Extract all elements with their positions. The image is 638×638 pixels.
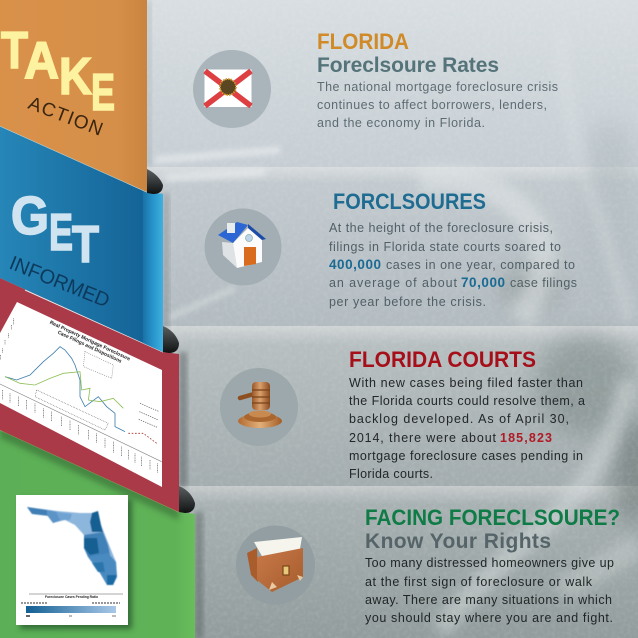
text block: know your rights: at the first sign of foreclosure or walk xyxy=(365,575,593,589)
text block: court backlog: 185,823 xyxy=(500,431,552,445)
heading: TAKE: K xyxy=(59,48,92,106)
chart: foreclosure filings xyxy=(0,302,162,487)
ribbon fold: blue xyxy=(163,326,179,353)
text block: height of the crisis: per year before the crisis. xyxy=(329,295,486,309)
text block: court backlog: mortgage foreclosure cases pending in xyxy=(349,449,583,463)
text block: height of the crisis: At the height of the foreclosure crisis, xyxy=(329,221,553,235)
text block: height of the crisis: 70,000 xyxy=(461,275,505,290)
projection line xyxy=(128,433,157,443)
text block: court backlog: Florida courts. xyxy=(349,467,433,481)
text block: height of the crisis: 400,000 xyxy=(329,257,381,272)
heading: TAKE: T xyxy=(1,22,28,80)
text block: height of the crisis: filings in Florida state courts soared to xyxy=(329,240,561,254)
heading: Florida Courts: FLORIDA COURTS xyxy=(349,347,536,372)
text block: height of the crisis: an average of about xyxy=(329,276,458,290)
heading: GET: T xyxy=(72,216,99,274)
text block: know your rights: away. There are many situations in which xyxy=(365,593,612,607)
ribbon fold: orange xyxy=(147,169,163,194)
filings line xyxy=(5,347,125,432)
ribbon: red xyxy=(0,278,179,520)
heading: TAKE xyxy=(1,22,115,122)
subheading: ACTION: ACTION xyxy=(25,93,106,141)
text block: court backlog: backlog developed. As of April 30, xyxy=(349,412,569,426)
map of Florida xyxy=(27,507,117,585)
chart axis xyxy=(0,318,162,473)
map legend: Foreclosure Cases Pending Ratio xyxy=(45,595,98,599)
heading: Florida Foreclosure Rates: Foreclsoure Rates xyxy=(317,54,499,77)
text block: national crisis: continues to affect borrowers, lenders, xyxy=(317,98,547,112)
heading: Facing Foreclosure: FACING FORECLSOURE? xyxy=(365,505,620,530)
chart title: Case Filings and Dispositions xyxy=(56,330,123,365)
subheading: INFORMED: INFORMED xyxy=(6,252,113,312)
text block: national crisis: The national mortgage foreclosure crisis xyxy=(317,80,558,94)
text block: height of the crisis: case filings xyxy=(510,276,577,290)
icon: gavel xyxy=(220,368,298,446)
text block: know your rights xyxy=(365,556,614,625)
text block: court backlog xyxy=(349,376,585,481)
icon: Florida flag xyxy=(193,50,271,128)
text block: national crisis xyxy=(317,80,558,130)
text block: court backlog: With new cases being filed faster than xyxy=(349,376,583,390)
heading: Florida Foreclosure Rates xyxy=(317,29,499,77)
heading: TAKE: A xyxy=(24,32,59,90)
icon: briefcase xyxy=(236,526,315,604)
heading: TAKE: E xyxy=(91,64,115,122)
heading: Foreclosures: FORCLSOURES xyxy=(333,189,486,214)
text block: court backlog: the Florida courts could resolve them, a xyxy=(349,394,585,408)
text block: height of the crisis: cases in one year, compared to xyxy=(386,258,575,272)
heading: GET xyxy=(11,186,99,274)
heading: GET: E xyxy=(49,204,73,262)
ribbon: orange xyxy=(0,0,147,192)
text block: know your rights: you should stay where you are and fight. xyxy=(365,611,613,625)
text block: national crisis: and the economy in Florida. xyxy=(317,116,485,130)
text block: court backlog: 2014, there were about xyxy=(349,431,497,445)
heading: Florida Foreclosure Rates: FLORIDA xyxy=(317,29,409,54)
ribbon fold: red xyxy=(179,486,195,513)
ribbon: blue xyxy=(0,126,163,352)
dispositions line xyxy=(5,372,123,408)
chart title: Real Property Mortgage Foreclosure xyxy=(48,320,131,363)
map card xyxy=(16,495,132,629)
text block: know your rights: Too many distressed homeowners give up xyxy=(365,556,614,570)
heading: Facing Foreclosure: Know Your Rights xyxy=(365,530,551,553)
text block: height of the crisis xyxy=(329,221,577,309)
heading: Facing Foreclosure xyxy=(365,505,620,553)
ribbon: green xyxy=(0,430,195,638)
heading: GET: G xyxy=(11,186,49,246)
icon: house xyxy=(204,208,282,286)
